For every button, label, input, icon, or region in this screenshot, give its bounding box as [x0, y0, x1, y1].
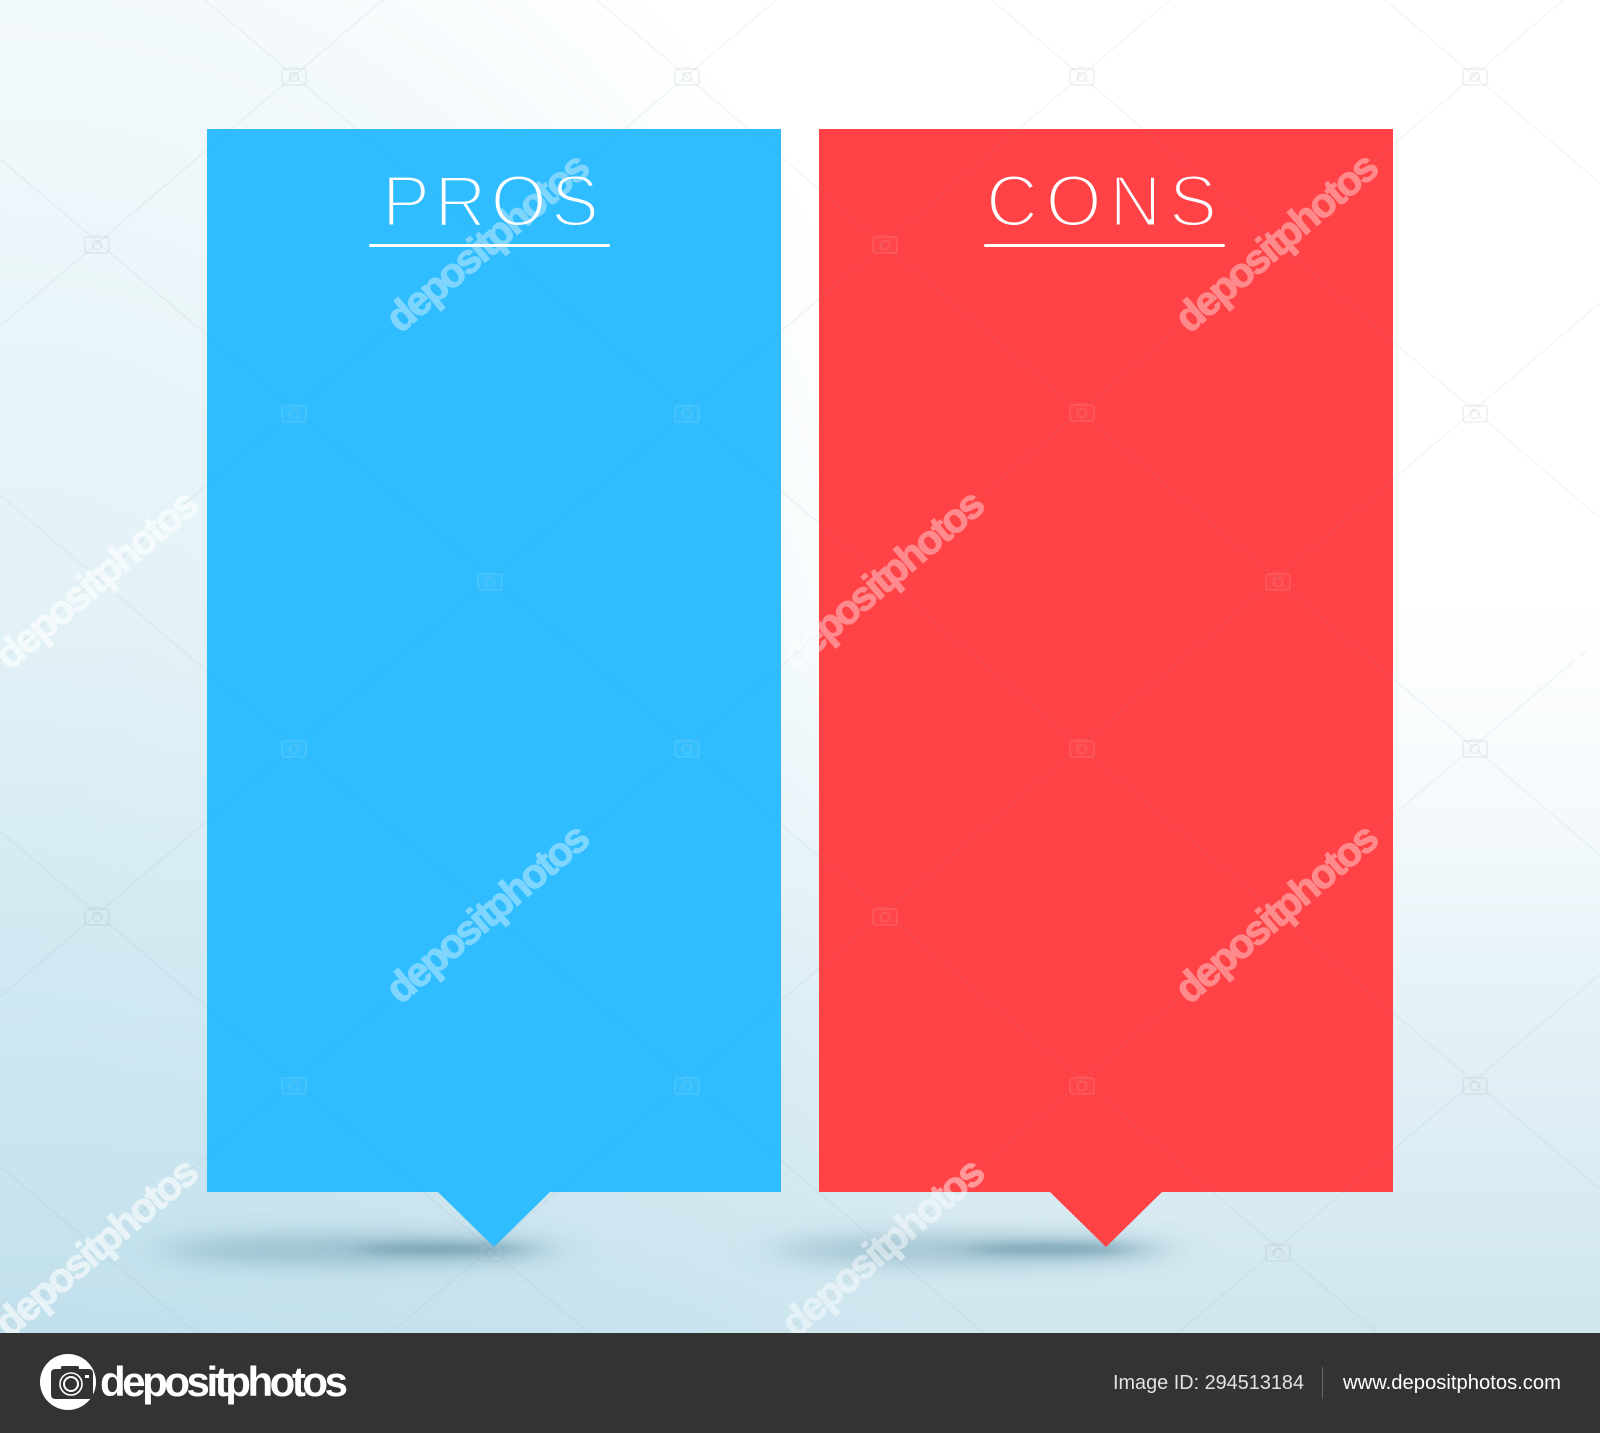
shadow: pros callout [160, 1235, 560, 1265]
watermark: depositphotos text: depositphotos [772, 1148, 993, 1346]
cons heading: CONS [986, 162, 1217, 242]
watermark: depositphotos text: depositphotos [1166, 814, 1387, 1012]
watermark: depositphotos text: depositphotos [1166, 143, 1387, 341]
watermark: camera icons on background [85, 66, 1487, 1261]
pros heading: PROS [382, 162, 599, 242]
watermark: camera icons on panels [282, 234, 1290, 1094]
logo wordmark: depositphotos [100, 1358, 348, 1405]
watermark: depositphotos text: depositphotos [772, 480, 993, 678]
cons callout shape [819, 129, 1393, 1247]
website url: www.depositphotos.com [1342, 1372, 1561, 1394]
image id: Image ID: 294513184 [1113, 1372, 1304, 1394]
icon: camera logo [40, 1354, 96, 1410]
footer bar [0, 1333, 1600, 1433]
pros underline [369, 244, 610, 247]
pros callout shape [207, 129, 781, 1247]
panel: pros [207, 129, 781, 1247]
shadow: cons callout [772, 1235, 1172, 1265]
footer separator [1322, 1367, 1323, 1399]
watermark: depositphotos text: depositphotos [377, 814, 598, 1012]
watermark: depositphotos text: depositphotos [377, 143, 598, 341]
cons underline [984, 244, 1225, 247]
footer background [0, 1333, 1600, 1433]
panel: cons [819, 129, 1393, 1247]
